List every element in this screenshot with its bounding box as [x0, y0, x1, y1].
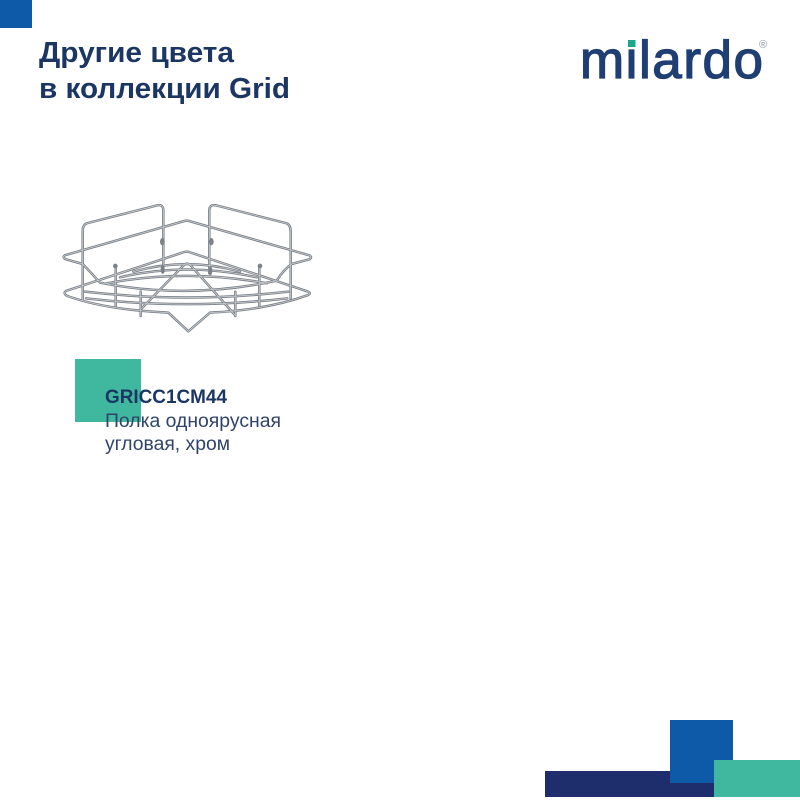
title: Другие цвета — [39, 37, 235, 69]
bottom decorative blocks — [545, 720, 800, 797]
product description: угловая, хром — [105, 434, 230, 455]
logo: milardo: milardo — [580, 31, 763, 90]
title — [39, 37, 290, 105]
teal accent square — [75, 359, 141, 422]
product description: Полка одноярусная — [105, 411, 281, 432]
product image: corner wire shelf — [64, 205, 311, 331]
logo: milardo: ® — [759, 39, 767, 51]
corner accent square — [0, 0, 32, 28]
title: в коллекции Grid — [39, 73, 290, 105]
product description — [105, 411, 281, 455]
shelf wires highlight layer — [64, 205, 311, 331]
shelf wires dark layer — [64, 205, 311, 331]
shelf post knobs — [113, 238, 262, 275]
product code: GRICC1CM44 — [105, 387, 227, 408]
